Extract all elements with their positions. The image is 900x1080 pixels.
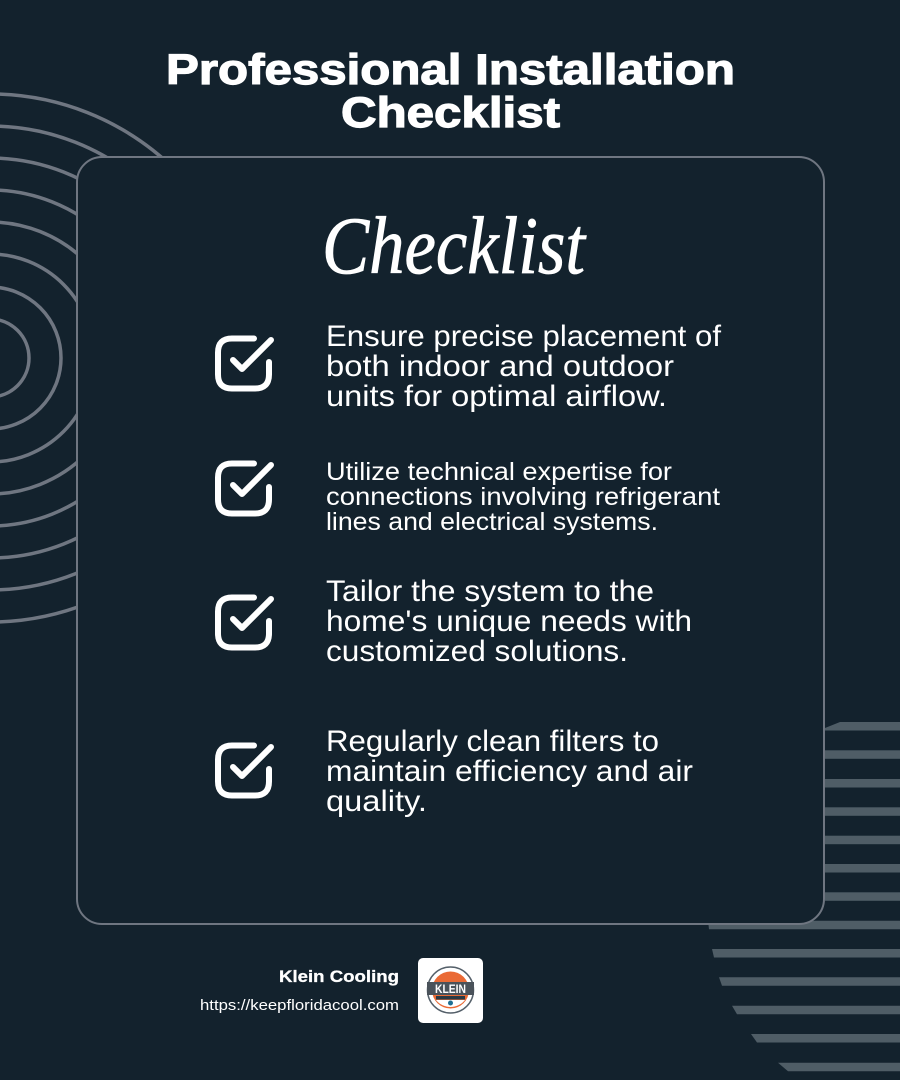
item 1 text: Ensure precise placement of <box>326 320 722 353</box>
item 2 text: lines and electrical systems. <box>326 508 658 536</box>
item 1 text: both indoor and outdoor <box>326 350 674 383</box>
item 3 text: customized solutions. <box>326 635 628 668</box>
panel heading: Checklist: Checklist <box>322 200 587 291</box>
footer brand name: Klein Cooling <box>279 968 399 986</box>
logo: Klein Cooling badge <box>418 958 483 1023</box>
item 4 text: quality. <box>326 785 427 818</box>
title: Checklist <box>341 89 560 137</box>
icon: checkbox 4 <box>218 746 271 796</box>
checklist item 2 <box>218 458 720 536</box>
logo: Klein Cooling badge: KLEIN <box>435 982 466 996</box>
item 3 text: Tailor the system to the <box>326 575 654 608</box>
item 3 text <box>326 575 692 668</box>
decorative concentric arcs <box>0 94 254 622</box>
icon: checkbox 3 <box>218 598 271 648</box>
panel: checklist <box>77 157 824 924</box>
title <box>166 46 735 137</box>
item 4 text: maintain efficiency and air <box>326 755 693 788</box>
item 4 text <box>326 725 693 818</box>
item 4 text: Regularly clean filters to <box>326 725 659 758</box>
icon: checkbox 2 <box>218 464 271 514</box>
item 3 text: home's unique needs with <box>326 605 692 638</box>
checklist item 3 <box>218 575 692 668</box>
item 1 text <box>326 320 722 413</box>
icon: checkbox 1 <box>218 338 271 388</box>
footer URL: https://keepfloridacool.com <box>200 997 399 1014</box>
item 2 text: connections involving refrigerant <box>326 483 720 511</box>
item 1 text: units for optimal airflow. <box>326 380 667 413</box>
item 2 text <box>326 458 720 536</box>
checklist item 1 <box>218 320 722 413</box>
decorative horizontal stripes <box>708 722 900 1071</box>
item 2 text: Utilize technical expertise for <box>326 458 672 486</box>
checklist item 4 <box>218 725 693 818</box>
title: Professional Installation <box>166 46 735 94</box>
